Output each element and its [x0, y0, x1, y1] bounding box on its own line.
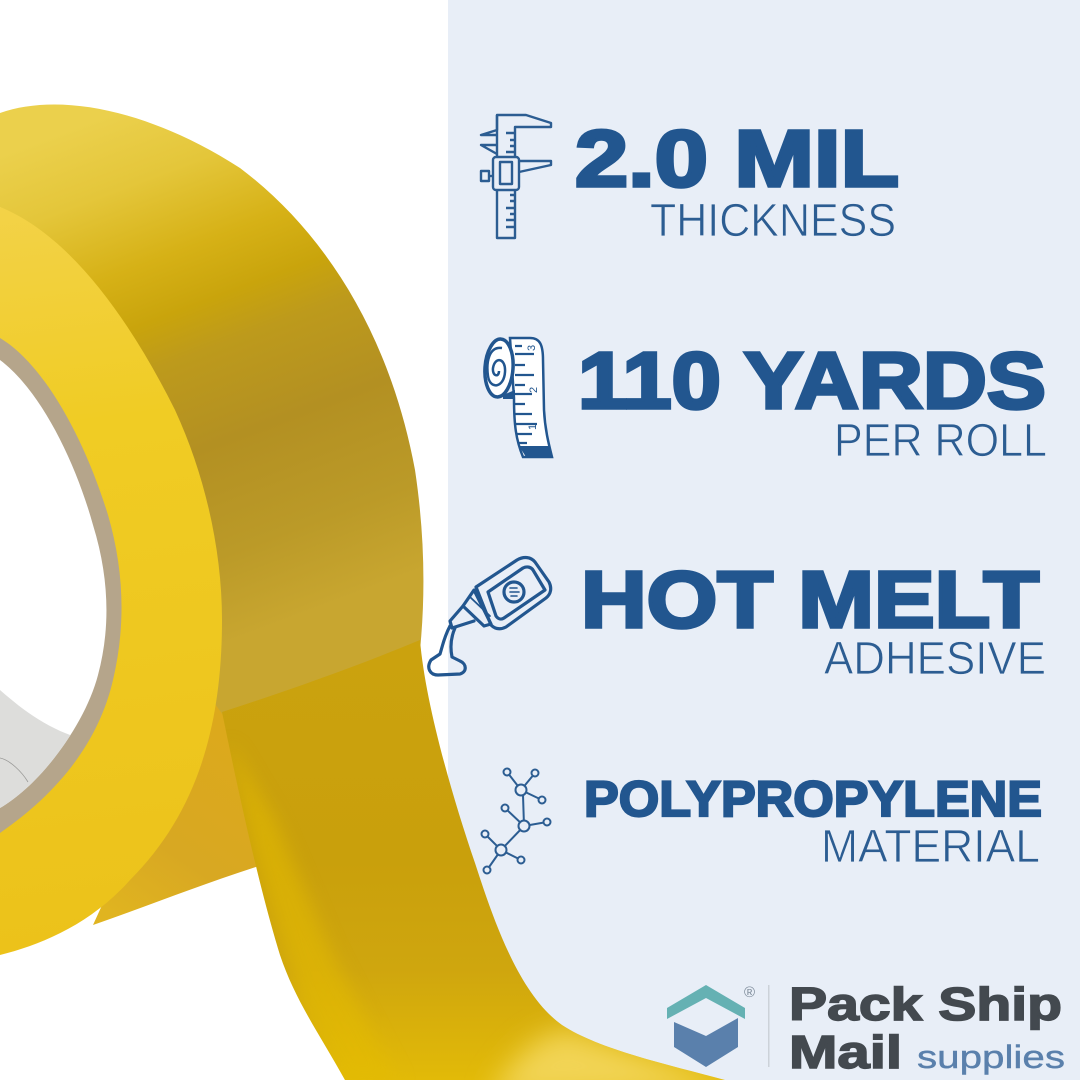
inner core shading [0, 690, 70, 808]
tape side face [0, 207, 222, 955]
icon: caliper [481, 115, 551, 238]
spec: adhesive [429, 555, 1046, 684]
value: polypropylene: POLYPROPYLENE [584, 771, 1042, 827]
value: hot melt: HOT MELT [581, 555, 1039, 644]
spec: material [482, 768, 1042, 874]
tape outer surface [0, 105, 423, 722]
logo wordmark line two: Mail [789, 1026, 902, 1078]
tape roll photo illustration [0, 105, 740, 1080]
logo divider [768, 985, 770, 1067]
icon: glue bottle [429, 558, 551, 675]
label: adhesive: ADHESIVE [824, 632, 1046, 684]
value: 110 yards: 110 YARDS [578, 336, 1046, 425]
brand logo [667, 978, 1065, 1078]
icon: molecule [482, 768, 550, 874]
tape unrolling strip [222, 640, 725, 1080]
logo mark [667, 985, 745, 1067]
core hole [0, 360, 106, 808]
label: material: MATERIAL [821, 820, 1040, 872]
strip highlights [228, 740, 740, 1080]
registered mark: ® [744, 984, 755, 1001]
icon: measuring tape [483, 338, 552, 457]
icon: measuring tape: 2 [528, 387, 540, 393]
cardboard core [0, 338, 122, 833]
icon: measuring tape: 3 [526, 345, 538, 351]
label: per roll: PER ROLL [834, 414, 1047, 466]
label: thickness: THICKNESS [650, 194, 896, 246]
icon: measuring tape: 1 [527, 424, 539, 430]
right panel background [448, 0, 1080, 1080]
spec: length [483, 336, 1047, 466]
spec: thickness [481, 114, 899, 246]
value: 2.0 MIL: 2.0 MIL [575, 114, 899, 203]
tape underside band [93, 680, 259, 925]
logo supplies text: supplies [917, 1039, 1065, 1075]
logo wordmark: Pack Ship [789, 978, 1062, 1030]
